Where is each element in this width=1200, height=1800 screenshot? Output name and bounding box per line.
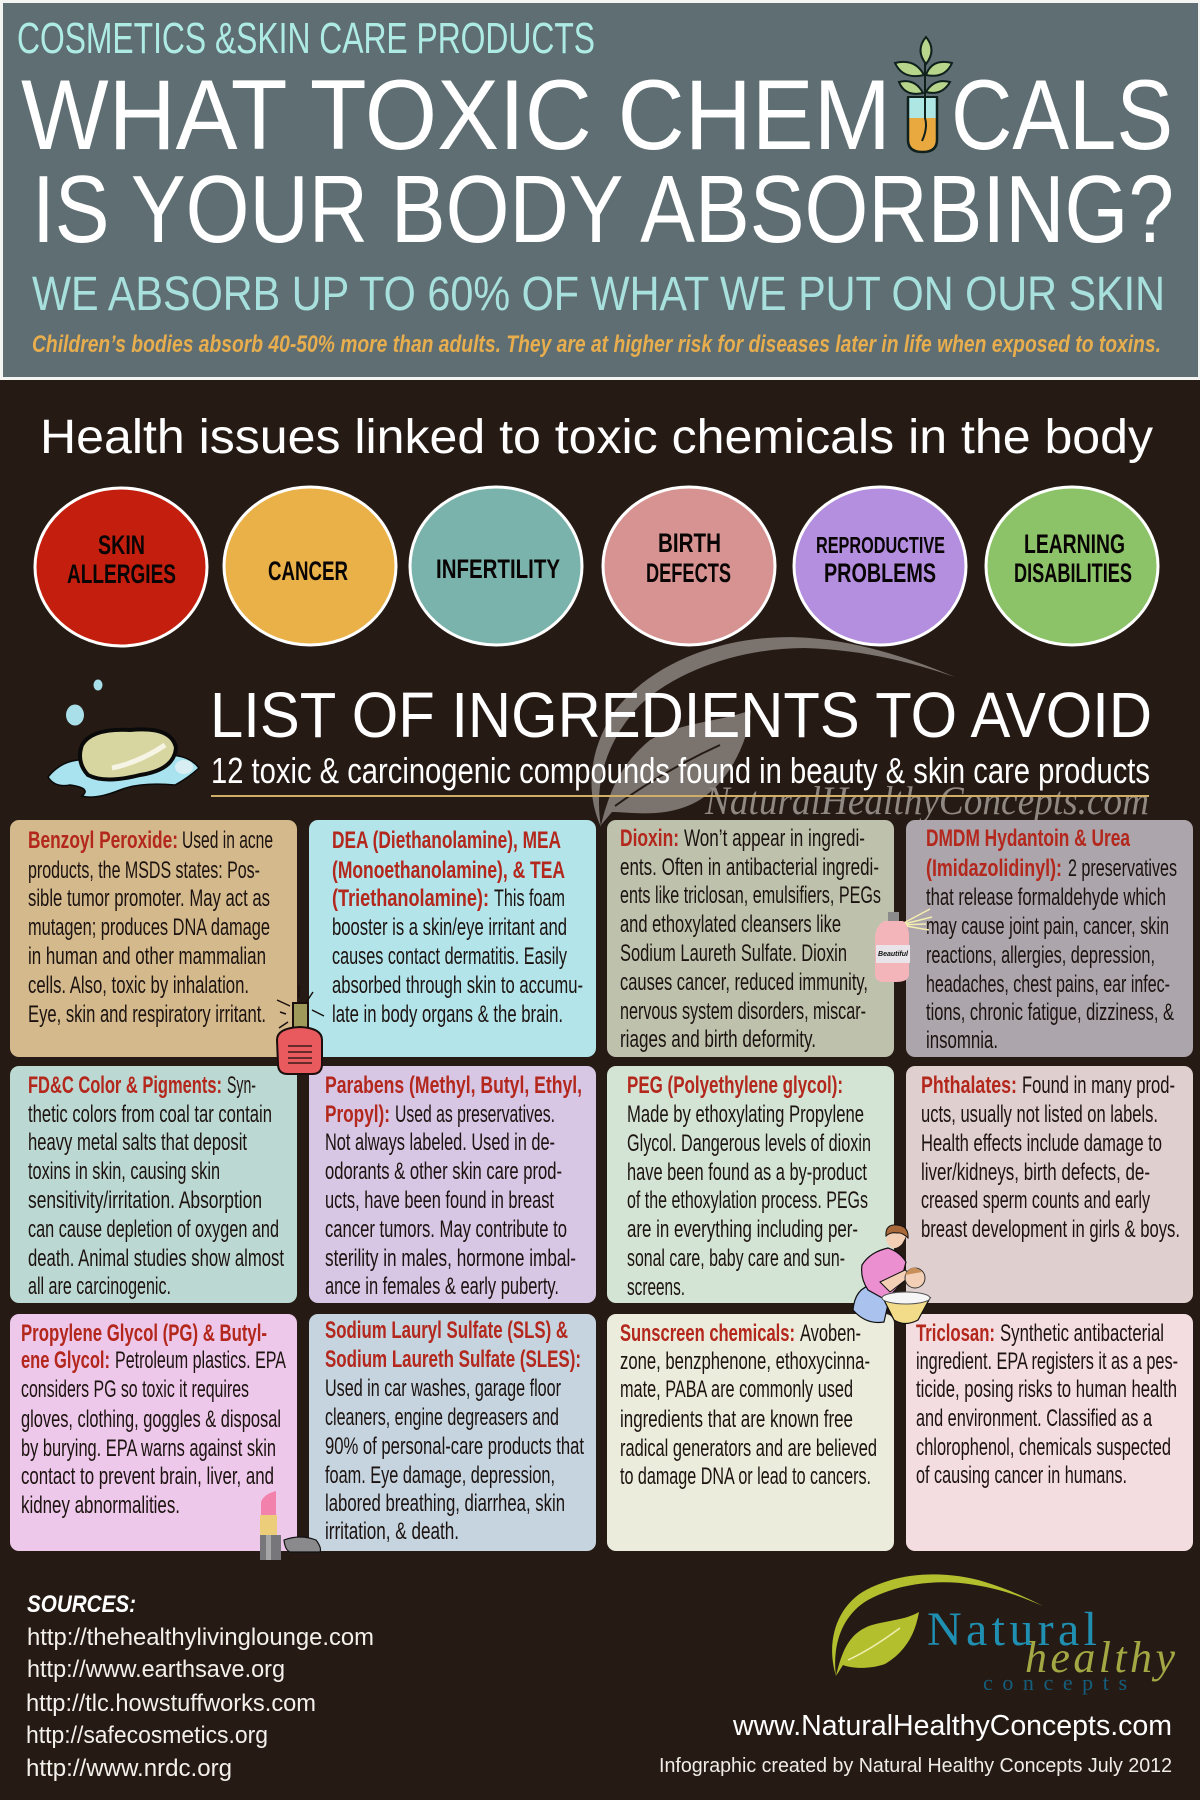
body text xyxy=(28,827,273,1028)
panel: sodium lauryl sulfate xyxy=(309,1314,596,1551)
body text: cells. Also, toxic by inhalation. xyxy=(28,972,249,999)
icon: spray bottle xyxy=(875,909,932,982)
body text xyxy=(921,1072,1180,1243)
body text: Glycol. Dangerous levels of dioxin xyxy=(627,1130,871,1157)
circle: birth defects xyxy=(603,487,775,645)
source links: http://www.earthsave.org xyxy=(27,1656,285,1683)
source links: http://thehealthylivinglounge.com xyxy=(27,1624,374,1651)
body text: all are carcinogenic. xyxy=(28,1273,171,1300)
body text xyxy=(620,1320,877,1490)
body text: death. Animal studies show almost xyxy=(28,1245,284,1272)
body text xyxy=(325,1375,584,1545)
body text: of the ethoxylation process. PEGs xyxy=(627,1187,868,1214)
panel: dioxin xyxy=(607,820,894,1057)
panel: PEG xyxy=(607,1066,894,1303)
body text: kidney abnormalities. xyxy=(21,1492,180,1519)
circle: reproductive problems xyxy=(794,487,966,645)
body text: odorants & other skin care prod- xyxy=(325,1158,562,1185)
panel: phthalates xyxy=(906,1066,1193,1303)
panel: parabens xyxy=(309,1066,596,1303)
heading: FD&C color: FD&C Color & Pigments: xyxy=(28,1072,222,1099)
body text xyxy=(620,825,881,1053)
heading: list of ingredients: LIST OF INGREDIENTS TO AVOID xyxy=(210,679,1152,751)
body text: and ethoxylated cleansers like xyxy=(620,911,841,938)
panel: propylene glycol xyxy=(10,1314,297,1551)
icon: parent bathing baby xyxy=(853,1225,930,1324)
body text: sensitivity/irritation. Absorption xyxy=(28,1187,262,1214)
panel: DMDM hydantoin xyxy=(906,820,1193,1057)
source links xyxy=(26,1624,374,1782)
source links: http://safecosmetics.org xyxy=(26,1722,268,1749)
body text: mate, PABA are commonly used xyxy=(620,1376,853,1403)
circle: birth defects: DEFECTS xyxy=(646,558,731,588)
body text: sible tumor promoter. May act as xyxy=(28,885,270,912)
circle: skin allergies xyxy=(35,488,207,646)
heading: parabens: Propyl): xyxy=(325,1101,390,1128)
logo wordmark: concepts xyxy=(983,1670,1127,1695)
body text: contact to prevent brain, liver, and xyxy=(21,1463,274,1490)
body text: toxins in skin, causing skin xyxy=(28,1158,220,1185)
credit line: Infographic created by Natural Healthy Concepts July 2012 xyxy=(659,1755,1172,1777)
header kicker: COSMETICS &SKIN CARE PRODUCTS xyxy=(17,14,595,63)
body text: in human and other mammalian xyxy=(28,943,266,970)
watermark: leaf logo xyxy=(591,637,955,827)
body text xyxy=(325,1101,576,1300)
circle: learning disabilities xyxy=(986,487,1158,645)
circle: skin allergies: ALLERGIES xyxy=(67,559,176,589)
body text: ance in females & early puberty. xyxy=(325,1273,559,1300)
body text xyxy=(627,1101,871,1301)
body text: sonal care, baby care and sun- xyxy=(627,1245,845,1272)
circle: cancer: CANCER xyxy=(268,556,348,586)
heading: sunscreen chemicals: Sunscreen chemicals: xyxy=(620,1320,795,1347)
body text: absorbed through skin to accumu- xyxy=(332,972,583,999)
body text: insomnia. xyxy=(926,1027,998,1054)
body text: mutagen; produces DNA damage xyxy=(28,914,270,941)
source links: http://www.nrdc.org xyxy=(26,1755,232,1782)
sources list xyxy=(26,1591,374,1782)
heading: benzoyl peroxide: Benzoyl Peroxide: xyxy=(28,827,178,854)
source links: http://tlc.howstuffworks.com xyxy=(26,1690,316,1717)
heading: DEA MEA TEA: DEA (Diethanolamine), MEA xyxy=(332,827,561,854)
circle: learning disabilities: LEARNING xyxy=(1024,529,1125,559)
body text xyxy=(28,1072,284,1300)
body text: heavy metal salts that deposit xyxy=(28,1129,247,1156)
body text: Syn- xyxy=(227,1072,256,1099)
heading: propylene glycol: ene Glycol: xyxy=(21,1347,110,1374)
body text xyxy=(332,885,583,1028)
body text: Won’t appear in ingredi- xyxy=(684,825,865,852)
heading: parabens: Parabens (Methyl, Butyl, Ethyl, xyxy=(325,1072,582,1099)
logo wordmark: Natural xyxy=(927,1603,1097,1656)
heading: parabens xyxy=(325,1072,582,1128)
circle: birth defects: BIRTH xyxy=(658,528,721,558)
health issue circles xyxy=(35,487,1158,646)
heading: propylene glycol: Propylene Glycol (PG) & Butyl- xyxy=(21,1320,267,1347)
icon: test tube with plant xyxy=(895,37,952,152)
heading: DEA MEA TEA: (Monoethanolamine), & TEA xyxy=(332,857,565,884)
body text: zone, benzphenone, ethoxycinna- xyxy=(620,1348,870,1375)
body text: Avoben- xyxy=(800,1320,861,1347)
icon: soap with bubbles xyxy=(48,680,199,797)
body text: thetic colors from coal tar contain xyxy=(28,1101,272,1128)
body text: causes contact dermatitis. Easily xyxy=(332,943,567,970)
circle: infertility: INFERTILITY xyxy=(436,554,560,584)
body text: 90% of personal-care products that xyxy=(325,1433,584,1460)
heading: sodium lauryl sulfate: Sodium Lauryl Sulfate (SLS) & xyxy=(325,1317,568,1344)
icon: spray bottle: Beautiful xyxy=(878,951,909,958)
header panel xyxy=(0,0,1200,380)
heading: DMDM hydantoin xyxy=(926,825,1130,882)
body text: cleaners, engine degreasers and xyxy=(325,1404,559,1431)
logo wordmark xyxy=(927,1603,1175,1695)
panel: DEA MEA TEA xyxy=(309,820,596,1057)
panel: benzoyl peroxide xyxy=(10,820,297,1057)
heading: DMDM hydantoin: (Imidazolidinyl): xyxy=(926,855,1062,882)
body text: Made by ethoxylating Propylene xyxy=(627,1101,864,1128)
body text: products, the MSDS states: Pos- xyxy=(28,857,260,884)
body text: Sodium Laureth Sulfate. Dioxin xyxy=(620,940,847,967)
watermark: site name: NaturalHealthyConcepts.com xyxy=(704,778,1149,823)
heading: dioxin: Dioxin: xyxy=(620,825,679,852)
heading: DEA MEA TEA: (Triethanolamine): xyxy=(332,885,489,912)
icon: nail polish bottle xyxy=(277,985,324,1074)
body text: cancer tumors. May contribute to xyxy=(325,1216,567,1243)
body text: ents. Often in antibacterial ingredi- xyxy=(620,854,879,881)
heading: triclosan: Triclosan: xyxy=(916,1320,995,1347)
body text xyxy=(926,855,1177,1054)
body text: by burying. EPA warns against skin xyxy=(21,1435,276,1462)
body text: causes cancer, reduced immunity, xyxy=(620,969,868,996)
body text: Used in acne xyxy=(182,827,273,854)
body text: screens. xyxy=(627,1274,685,1301)
heading: phthalates: Phthalates: xyxy=(921,1072,1017,1099)
circle: reproductive problems: REPRODUCTIVE xyxy=(816,532,945,558)
body text: foam. Eye damage, depression, xyxy=(325,1462,555,1489)
body text: nervous system disorders, miscar- xyxy=(620,998,866,1025)
body text: have been found as a by-product xyxy=(627,1159,867,1186)
logo: natural healthy concepts xyxy=(832,1574,1175,1695)
body text xyxy=(21,1347,286,1519)
circle: cancer xyxy=(224,487,396,645)
body text: riages and birth deformity. xyxy=(620,1026,816,1053)
body text: are in everything including per- xyxy=(627,1216,858,1243)
body text: radical generators and are believed xyxy=(620,1435,877,1462)
body text: Used as preservatives. xyxy=(395,1101,555,1128)
main title: WHAT TOXIC CHEM xyxy=(21,59,891,170)
circle: infertility xyxy=(410,487,582,645)
body text: gloves, clothing, goggles & disposal xyxy=(21,1406,281,1433)
body text: Used in car washes, garage floor xyxy=(325,1375,561,1402)
circle: learning disabilities: DISABILITIES xyxy=(1014,558,1132,588)
body text: late in body organs & the brain. xyxy=(332,1001,563,1028)
icon: lipstick xyxy=(260,1491,320,1560)
body text: considers PG so toxic it requires xyxy=(21,1376,249,1403)
body text: Not always labeled. Used in de- xyxy=(325,1129,555,1156)
body text: Eye, skin and respiratory irritant. xyxy=(28,1001,266,1028)
body text xyxy=(916,1320,1178,1489)
heading: propylene glycol xyxy=(21,1320,267,1374)
body text: ucts, have been found in breast xyxy=(325,1187,554,1214)
heading: DEA MEA TEA xyxy=(332,827,565,912)
body text: to damage DNA or lead to cancers. xyxy=(620,1463,871,1490)
sources heading: SOURCES: xyxy=(27,1591,136,1618)
main title xyxy=(21,59,1174,263)
heading: PEG: PEG (Polyethylene glycol): xyxy=(627,1072,843,1099)
circle: reproductive problems: PROBLEMS xyxy=(824,558,936,588)
panel: sunscreen chemicals xyxy=(607,1314,894,1551)
body text: This foam xyxy=(494,885,565,912)
body text: booster is a skin/eye irritant and xyxy=(332,914,567,941)
body text: ingredients that are known free xyxy=(620,1406,853,1433)
logo wordmark: healthy xyxy=(1025,1633,1175,1682)
website url: www.NaturalHealthyConcepts.com xyxy=(732,1710,1172,1742)
body text: ents like triclosan, emulsifiers, PEGs xyxy=(620,882,881,909)
body text: irritation, & death. xyxy=(325,1518,459,1545)
panel: FD&C color xyxy=(10,1066,297,1303)
heading: sodium lauryl sulfate: Sodium Laureth Sulfate (SLES): xyxy=(325,1346,581,1373)
body text: can cause depletion of oxygen and xyxy=(28,1216,279,1243)
body text: Petroleum plastics. EPA xyxy=(115,1347,286,1374)
panel: triclosan xyxy=(906,1314,1193,1551)
heading: sodium lauryl sulfate xyxy=(325,1317,581,1373)
circle: skin allergies: SKIN xyxy=(98,530,145,560)
body text: labored breathing, diarrhea, skin xyxy=(325,1490,565,1517)
logo leaf xyxy=(832,1574,1043,1676)
heading: health issues: Health issues linked to toxic chemicals in the body xyxy=(40,411,1153,464)
body text: sterility in males, hormone imbal- xyxy=(325,1245,576,1272)
